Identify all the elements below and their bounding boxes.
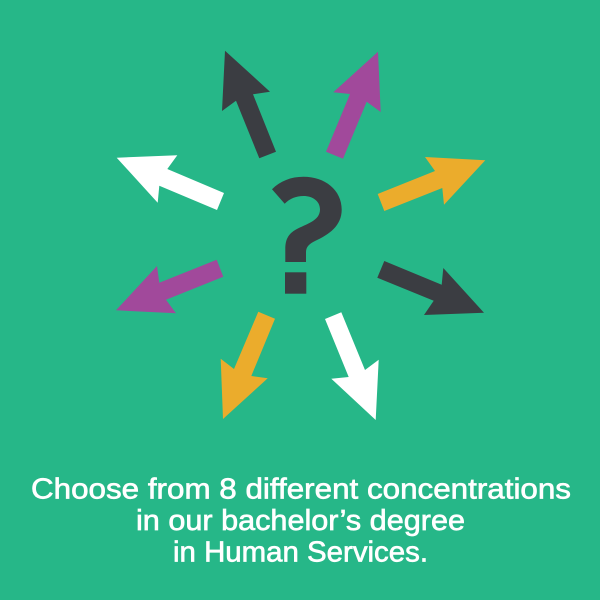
caption text	[31, 474, 571, 568]
caption text: Choose from 8 different concentrations	[31, 474, 571, 506]
caption text: in our bachelor’s degree	[136, 505, 465, 537]
arrow: orange, right-up	[378, 157, 485, 211]
caption text: in Human Services.	[173, 536, 428, 568]
arrow: white, left-up	[117, 155, 224, 210]
arrow: purple, left-down	[116, 260, 223, 313]
arrow: purple, up-right	[326, 52, 381, 159]
arrow: dark, up-left	[222, 51, 276, 158]
arrow: orange, down-left	[221, 312, 275, 419]
icon: question mark	[272, 177, 342, 294]
arrow: dark, right-down	[377, 261, 484, 315]
arrow: white, down-right	[325, 312, 379, 420]
